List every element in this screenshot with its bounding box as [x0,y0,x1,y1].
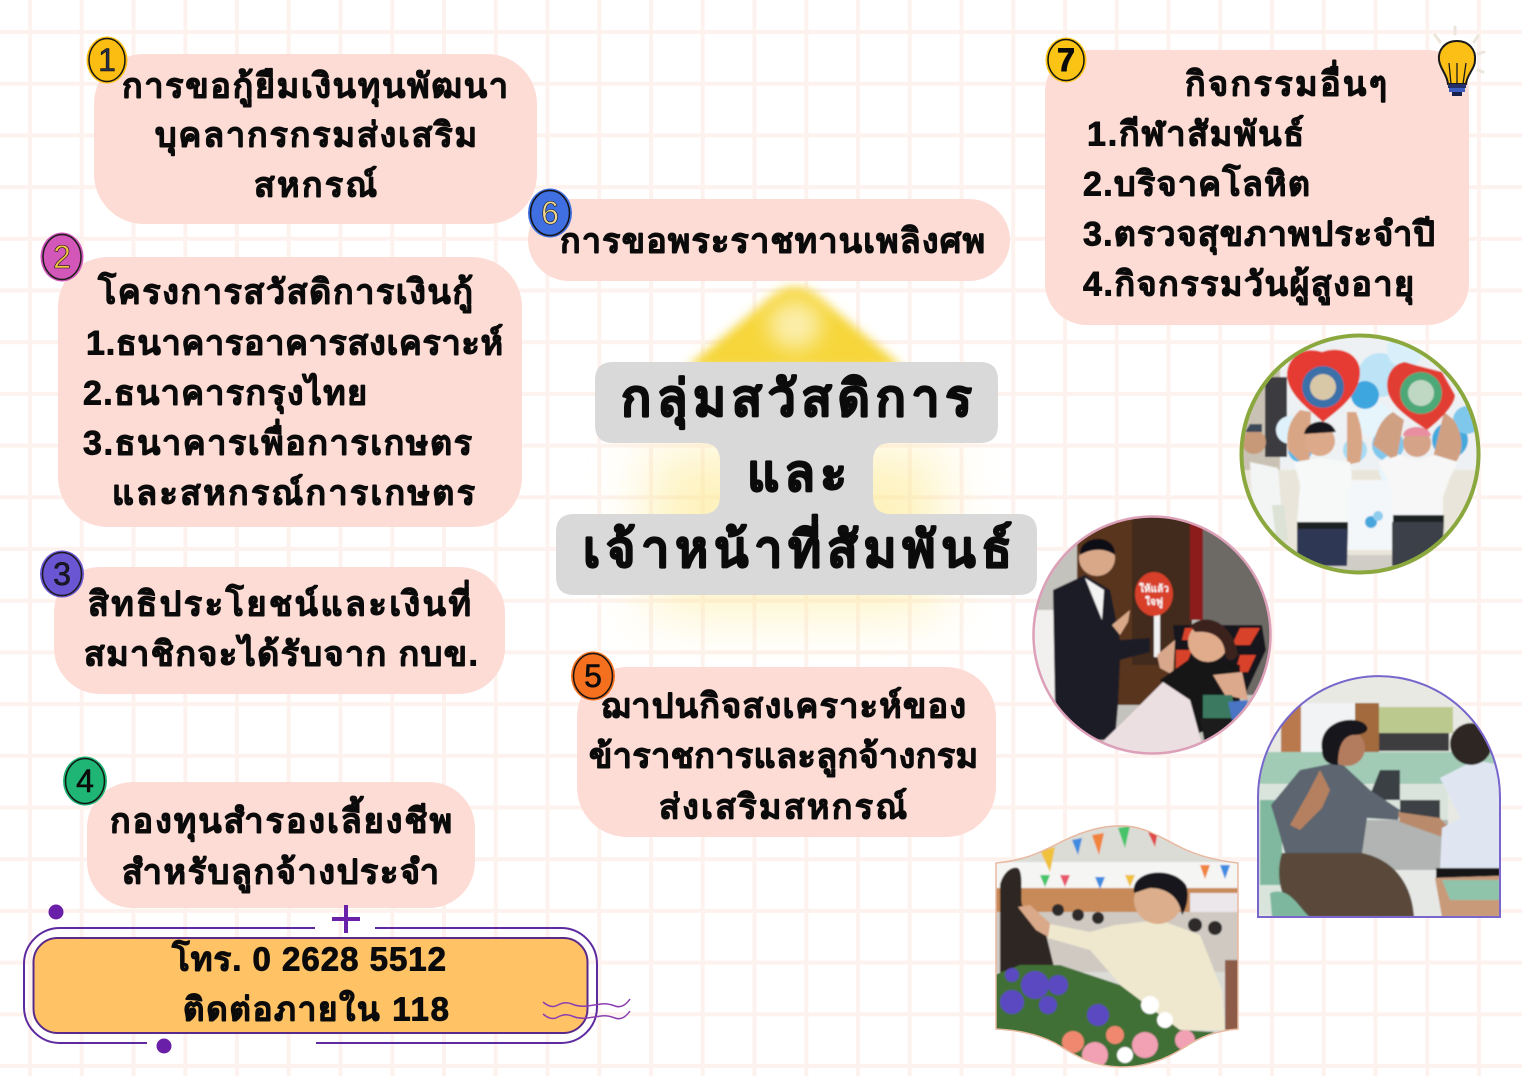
panel 1: staff loans [94,54,537,224]
panel 6: royal cremation: การขอพระราชทานเพลิงศพ [560,222,985,260]
panel 7: other activities [1045,50,1469,325]
contact box [24,904,630,1054]
panel 2: welfare loan projects: 2.ธนาคารกรุงไทย [83,372,367,414]
panel 2: welfare loan projects: และสหกรณ์การเกษตร [112,474,476,512]
badge 2: 2 [53,239,71,275]
panel 3: GPF benefits: สมาชิกจะได้รับจาก กบข. [84,634,478,674]
photo: merit ceremony [994,824,1240,1070]
badge 5: 5 [584,658,602,694]
panel 7: other activities: 3.ตรวจสุขภาพประจำปี [1083,216,1435,256]
photo: blood donation: ให้แล้ว [1139,582,1169,595]
badge 3 [40,550,84,598]
badge 6 [528,188,572,238]
title block: เจ้าหน้าที่สัมพันธ์ [583,514,1012,578]
photo: sports day [1240,332,1481,580]
panel 7: other activities: 2.บริจาคโลหิต [1083,164,1310,204]
badge 7 [1046,38,1086,82]
title block: กลุ่มสวัสดิการ [621,370,972,430]
panel 7: other activities: กิจกรรมอื่นๆ [1185,60,1387,104]
panel 2: welfare loan projects: 3.ธนาคารเพื่อการเกษตร [83,418,473,462]
badge 6: 6 [541,195,559,231]
panel 2: welfare loan projects: 1.ธนาคารอาคารสงเคราะห์ [86,324,503,362]
panel 1: staff loans: บุคลากรกรมส่งเสริม [155,116,477,156]
panel 6: royal cremation [528,199,1010,281]
panel 4: provident fund: สำหรับลูกจ้างประจำ [122,854,439,894]
photo: blood donation [1030,515,1275,755]
panel 2: welfare loan projects [58,257,522,527]
photo: blood donation: ใจฟู [1145,595,1163,609]
contact box: โทร. 0 2628 5512 [171,940,446,978]
panel 7: other activities: 1.กีฬาสัมพันธ์ [1087,114,1304,154]
panel 3: GPF benefits [54,567,505,694]
panel 4: provident fund: กองทุนสำรองเลี้ยงชีพ [110,796,452,842]
panel 7: other activities: 4.กิจกรรมวันผู้สูงอายุ [1083,266,1414,306]
panel 1: staff loans: การขอกู้ยืมเงินทุนพัฒนา [122,68,508,108]
badge 7: 7 [1057,42,1075,78]
panel 5: funeral welfare: ข้าราชการและลูกจ้างกรม [589,738,978,778]
panel 2: welfare loan projects: โครงการสวัสดิการเงินกู้ [97,272,473,314]
panel 3: GPF benefits: สิทธิประโยชน์และเงินที่ [88,580,471,624]
panel 4: provident fund [87,782,475,908]
panel 5: funeral welfare: ฌาปนกิจสงเคราะห์ของ [601,686,966,726]
icon: light bulb [1435,27,1484,96]
badge 4 [63,756,107,806]
badge 2 [40,232,84,282]
panel 1: staff loans: สหกรณ์ [254,166,377,204]
yellow glow behind title [650,287,940,610]
badge 5 [571,652,615,700]
title block: และ [747,446,847,502]
badge 1 [86,36,128,84]
panel 5: funeral welfare: ส่งเสริมสหกรณ์ [659,788,907,826]
badge 4: 4 [76,763,94,799]
photo: health check [1255,670,1505,920]
badge 3: 3 [53,556,71,592]
badge 1: 1 [98,42,116,78]
panel 5: funeral welfare [577,667,996,837]
contact box: ติดต่อภายใน 118 [183,990,449,1028]
title block [556,362,1037,595]
